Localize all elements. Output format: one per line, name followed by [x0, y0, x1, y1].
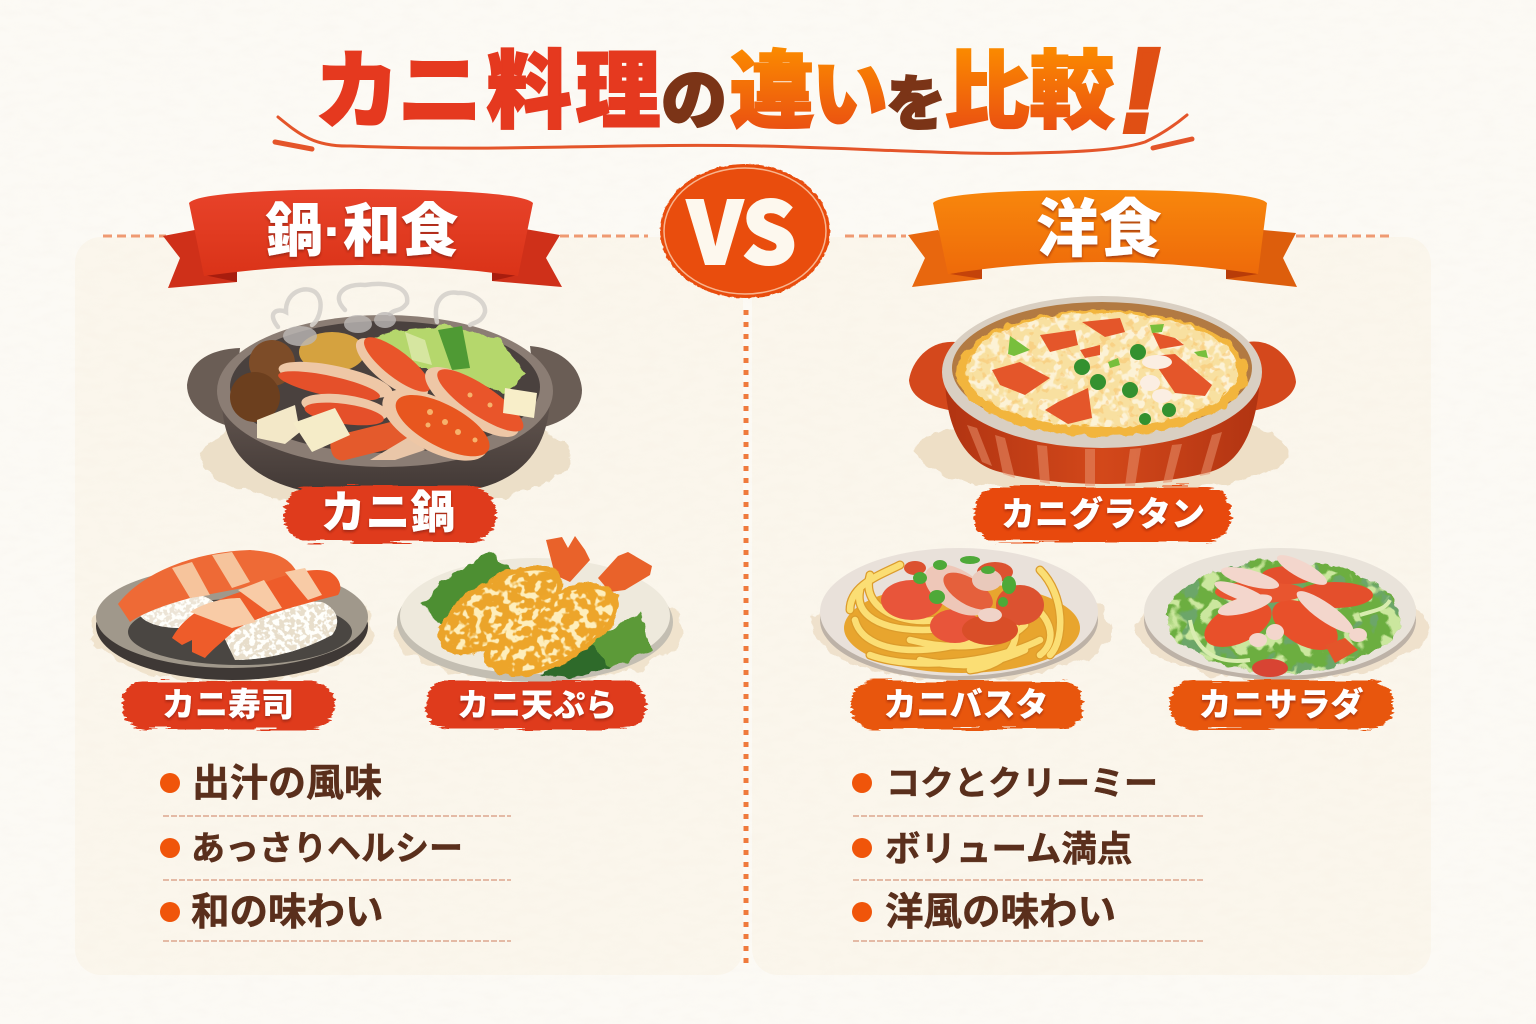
label: kani gratin: カニグラタン: [1001, 495, 1205, 534]
feature list: yoshoku: ボリューム満点: [885, 829, 1132, 869]
gratin toppings: [992, 318, 1212, 424]
label: kani sushi: カニ寿司: [162, 686, 294, 723]
dish: crab sushi: [90, 550, 374, 682]
feature list: washoku: 和の味わい: [191, 891, 384, 934]
label: kani pasta: カニバスタ: [884, 686, 1048, 723]
label: kani pasta: [851, 681, 1083, 729]
VS badge: VS: [686, 164, 797, 289]
shiso leaves: [422, 552, 652, 678]
label: kani tempura: カニ天ぷら: [457, 687, 617, 723]
ribbon: yoshoku heading: [908, 190, 1297, 287]
feature list: yoshoku: [852, 765, 1203, 941]
gratin handles: [909, 342, 1296, 412]
label: kani tempura: [426, 681, 646, 729]
dish: crab tempura: [392, 536, 684, 696]
title: 料: [486, 45, 572, 140]
title: [275, 25, 1192, 157]
feature list: yoshoku: 洋風の味わい: [885, 891, 1116, 934]
label: kani salad: カニサラダ: [1198, 686, 1364, 723]
dish: crab salad: [1136, 548, 1428, 680]
title: い: [812, 53, 888, 138]
title exclamation mark: !: [1110, 25, 1173, 157]
label: kani nabe: カニ鍋: [320, 487, 456, 538]
feature list: washoku: 出汁の風味: [192, 763, 382, 805]
pasta crab topping: [881, 554, 1044, 645]
title: カ: [314, 45, 400, 140]
dish: crab gratin: [909, 296, 1296, 494]
feature list: washoku: [160, 763, 511, 941]
feature list: washoku: あっさりヘルシー: [191, 830, 463, 868]
tempura: [423, 547, 634, 696]
dish stripes: [967, 425, 1222, 486]
dish: crab pasta: [812, 548, 1112, 680]
salad greens: [1167, 561, 1399, 673]
noodles: [850, 565, 1060, 670]
ribbon: washoku heading: [163, 189, 562, 288]
label: kani nabe: [284, 486, 496, 542]
title: の: [661, 63, 727, 137]
pot handles: [187, 346, 582, 428]
sushi pieces: [118, 550, 340, 660]
title: 違: [729, 45, 815, 140]
label: kani salad: [1170, 681, 1393, 729]
title: 比: [944, 45, 1030, 140]
label: kani gratin: [974, 487, 1231, 542]
VS badge: [660, 164, 830, 298]
hot pot ingredients: [230, 325, 537, 476]
title: を: [886, 71, 946, 138]
dish: crab hot pot: [187, 284, 582, 508]
dashed guide lines: [103, 236, 1394, 970]
title: 理: [575, 45, 661, 140]
panel: yoshoku background: [752, 237, 1431, 975]
shrimp tails: [546, 536, 652, 592]
title: ニ: [397, 45, 483, 140]
ribbon: yoshoku heading: 洋食: [1036, 195, 1162, 265]
salad crab: [1197, 550, 1373, 663]
title underline swoosh: [275, 115, 1192, 153]
feature list: yoshoku: コクとクリーミー: [886, 765, 1158, 803]
steam: [273, 284, 485, 327]
panel: washoku background: [75, 237, 743, 975]
title: 較: [1029, 45, 1115, 140]
label: kani sushi: [122, 681, 335, 729]
ribbon: washoku heading: 鍋·和食: [265, 199, 459, 264]
